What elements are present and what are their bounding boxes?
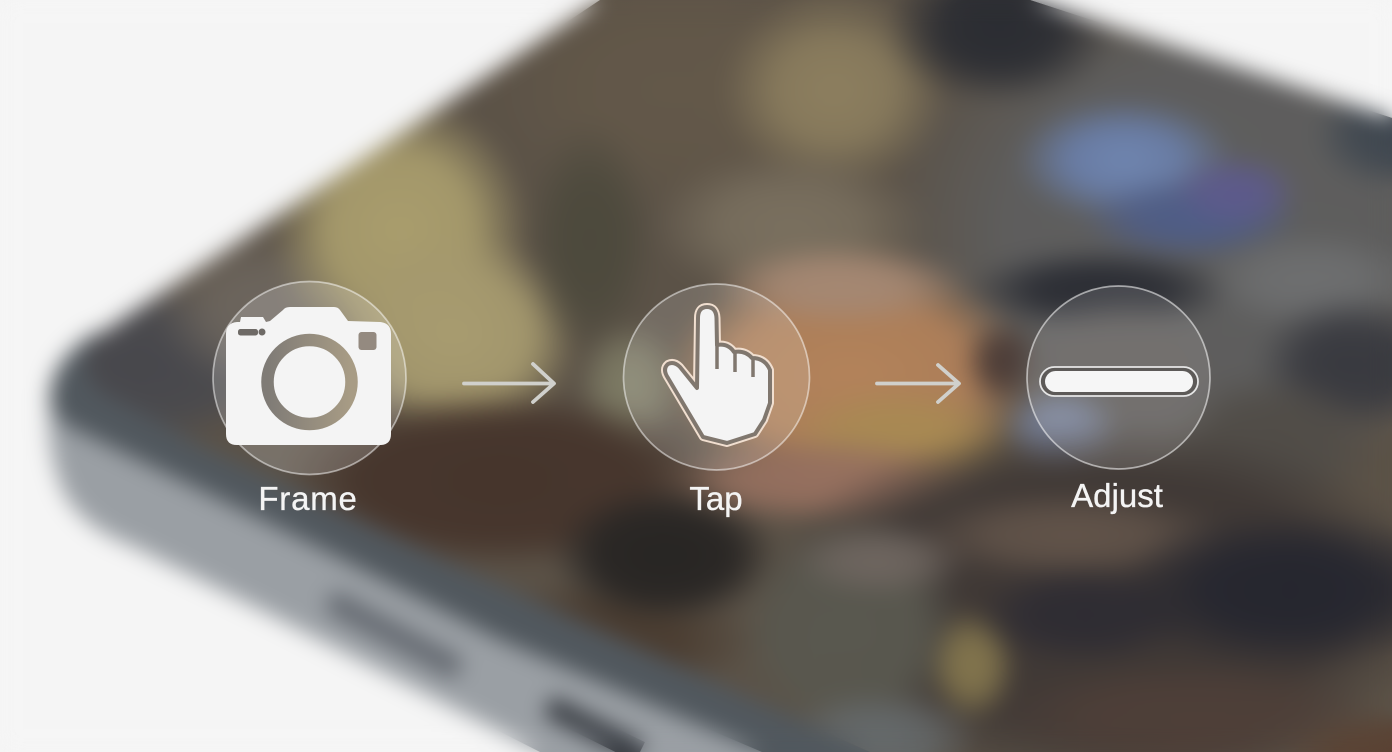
charging port — [548, 706, 640, 752]
speaker grille — [338, 605, 450, 665]
icon: slider bar — [1040, 367, 1198, 396]
label: Tap: Tap — [689, 480, 743, 517]
arrow: Frame to Tap — [464, 364, 554, 402]
circle: Adjust — [1027, 286, 1210, 469]
arrow: Tap to Adjust — [877, 365, 959, 402]
step: Adjust — [1027, 286, 1210, 514]
phone bezel band — [50, 332, 880, 752]
icon: camera — [226, 307, 391, 445]
label: Adjust: Adjust — [1071, 477, 1163, 514]
step: Tap — [624, 284, 810, 517]
step: Frame — [213, 282, 406, 517]
circle: Frame — [213, 282, 406, 474]
icon: pointing hand — [665, 307, 770, 443]
phone side body — [49, 370, 800, 752]
circle: Tap — [624, 284, 810, 470]
label: Frame: Frame — [258, 480, 358, 517]
